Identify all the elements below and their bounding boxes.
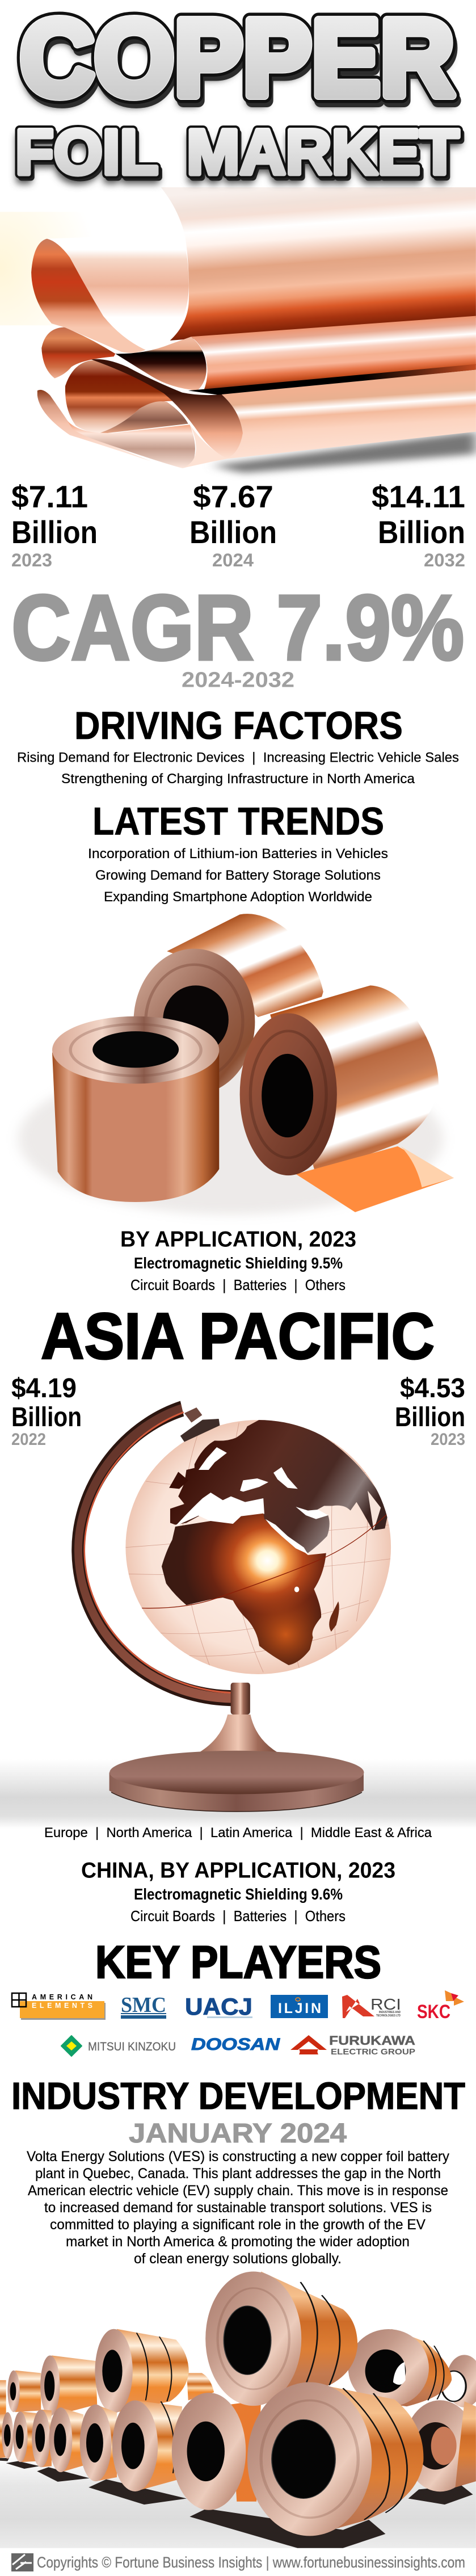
logo: Mitsui Kinzoku: [61, 2036, 176, 2056]
globe foot: [173, 1683, 304, 1763]
china segment highlight: Electromagnetic Shielding 9.6%: [134, 1885, 343, 1903]
logo: RCI: TECHNOLOGIES LTD: [376, 2014, 401, 2018]
copper coils image: [0, 2271, 476, 2548]
logo: SKC: [417, 1990, 464, 2023]
loose foil: [296, 1146, 454, 1212]
logo: UACJ: UACJ: [185, 1993, 252, 2020]
title line two: FOIL: [18, 120, 161, 191]
logo: RCI: RCI: [370, 1995, 401, 2013]
right rolls: [348, 2329, 476, 2491]
title line two: MARKET: [189, 120, 461, 191]
floor: [0, 2453, 476, 2548]
stat: 2023 region: 2023: [431, 1430, 465, 1449]
stat: 2023: Billion: [11, 514, 98, 550]
title: [15, 0, 461, 194]
logo: SMC: SMC: [121, 1993, 166, 2017]
development body text: to increased demand for sustainable transport solutions. VES is: [44, 2200, 432, 2216]
heading: driving factors: DRIVING FACTORS: [74, 704, 403, 747]
title line two: MARKET: [187, 117, 459, 187]
africa: [162, 1514, 326, 1665]
lower drape: [91, 359, 243, 459]
equator: [138, 1514, 388, 1608]
copper rolls image: [18, 914, 454, 1215]
stat: 2022: $4.19: [11, 1373, 77, 1403]
title shadow: FOIL: [15, 123, 158, 194]
hero foil image: [0, 187, 476, 473]
top pivot: [180, 1407, 220, 1442]
latest trends list: Expanding Smartphone Adoption Worldwide: [104, 889, 372, 905]
inner hump: [100, 401, 188, 433]
lake: [294, 1587, 299, 1592]
development body text: [27, 2149, 449, 2267]
china segment list: Circuit Boards | Batteries | Others: [130, 1907, 346, 1924]
segment highlight: Electromagnetic Shielding 9.5%: [134, 1254, 343, 1272]
stat: 2024: 2024: [212, 550, 254, 570]
left warm glow: [0, 212, 97, 325]
deep lobe: [65, 360, 173, 433]
title line two: [15, 117, 461, 191]
title shadow: COPPER: [20, 5, 454, 127]
upright roll: [52, 1016, 219, 1202]
title shadow: MARKET: [187, 123, 459, 194]
bottom fold: [182, 425, 228, 468]
black sea: [240, 1478, 268, 1491]
driving factors list: [17, 750, 459, 787]
logo: RCI: [342, 1995, 401, 2018]
logo: Doosan: DOOSAN: [191, 2035, 281, 2054]
heading: key players: KEY PLAYERS: [95, 1937, 381, 1988]
date: JANUARY 2024: [129, 2119, 347, 2149]
far rolls: [0, 2329, 214, 2420]
title line two: MARKET: [187, 117, 459, 187]
logo: ILJIN: [271, 1995, 328, 2018]
globe arm: [78, 1409, 232, 1698]
madagascar: [329, 1602, 339, 1632]
title line two: FOIL: [15, 117, 158, 187]
lower sheet: [222, 370, 476, 459]
base rim line: [111, 1792, 362, 1812]
small lobe: [37, 390, 151, 461]
development body text: market in North America & promoting the wider adoption: [66, 2234, 410, 2250]
logo: ILJIN: ILJIN: [278, 2001, 321, 2016]
driving factors list: Rising Demand for Electronic Devices | Increasing Electric Vehicle Sales: [17, 750, 459, 766]
arabian sea: [368, 1491, 381, 1531]
logo: RCI: INDUSTRIES AND: [379, 2011, 401, 2014]
title line one: COPPER: [22, 2, 457, 124]
logo: American Elements: AMERICAN: [32, 1993, 92, 2001]
right roll: [240, 985, 454, 1212]
rear foil sheet: [161, 187, 476, 341]
stat: 2032: 2032: [424, 550, 465, 570]
globe sphere: [125, 1407, 391, 1680]
lower sheet left: [67, 420, 195, 468]
heading: latest trends: LATEST TRENDS: [92, 800, 384, 843]
stat: 2023 region: [395, 1373, 465, 1449]
segment list: Circuit Boards | Batteries | Others: [130, 1276, 346, 1293]
stat: 2032: Billion: [378, 514, 465, 550]
baltic sea: [199, 1447, 227, 1470]
logo: Furukawa: FURUKAWA: [329, 2033, 415, 2048]
stat: 2023: $7.11: [11, 479, 88, 514]
latest trends list: Incorporation of Lithium-ion Batteries in Vehicles: [88, 846, 388, 862]
stat: 2024: [189, 479, 277, 570]
development body text: of clean energy solutions globally.: [134, 2251, 342, 2267]
big front roll: [247, 2382, 423, 2536]
back roll: [133, 914, 323, 1095]
logo: Mitsui Kinzoku: MITSUI KINZOKU: [88, 2040, 176, 2053]
stat: 2023 region: Billion: [395, 1402, 465, 1432]
dark gap: [188, 364, 476, 396]
middle sheet: [191, 316, 476, 392]
logo: Furukawa: [290, 2033, 415, 2057]
latest trends list: [88, 846, 388, 905]
logo: American Elements: ELEMENTS: [32, 2002, 92, 2010]
stat: 2024: $7.67: [193, 479, 273, 514]
heading: china by application: CHINA, BY APPLICATION, 2023: [81, 1858, 395, 1883]
stat: 2023: [11, 479, 98, 570]
coil stands: [0, 2458, 473, 2548]
title line two: FOIL: [15, 117, 158, 187]
stat: 2022: 2022: [11, 1430, 46, 1449]
left lobe: [41, 327, 115, 379]
stat: 2022: Billion: [11, 1402, 82, 1432]
curl inner: [31, 239, 146, 353]
eurasia and europe: [170, 1419, 389, 1553]
logo: American Elements: [12, 1993, 106, 2020]
heading: by application: BY APPLICATION, 2023: [120, 1227, 356, 1252]
curl front: [47, 234, 189, 350]
globe base: [109, 1751, 364, 1812]
stat: 2032: $14.11: [372, 479, 465, 514]
southern africa glow: [246, 1599, 321, 1665]
grid lines: [125, 1423, 391, 1672]
stacked top roll: [205, 2271, 357, 2502]
stat: 2022: [11, 1373, 82, 1449]
base shadow: [0, 1759, 476, 1829]
caspian sea: [273, 1467, 298, 1489]
stat: 2023 region: $4.53: [400, 1373, 465, 1403]
british isles: [169, 1472, 185, 1489]
other regions: Europe | North America | Latin America | Middle East & Africa: [44, 1825, 432, 1840]
middle front roll: [172, 2393, 246, 2510]
stat: 2024: Billion: [189, 514, 277, 550]
front row small: [0, 2401, 182, 2491]
central drape: [115, 337, 207, 390]
title shadow: [15, 5, 459, 194]
floor shadow: [18, 1062, 443, 1215]
mediterranean: [175, 1493, 264, 1526]
persian gulf: [296, 1507, 328, 1519]
stat: 2023: 2023: [11, 550, 52, 570]
driving factors list: Strengthening of Charging Infrastructure in North America: [61, 771, 415, 787]
development body text: Volta Energy Solutions (VES) is constructing a new copper foil battery: [27, 2149, 449, 2165]
red sea: [266, 1519, 308, 1554]
globe stand: [78, 1409, 364, 1812]
development body text: American electric vehicle (EV) supply chain. This move is in response: [28, 2183, 448, 2199]
stat: 2032: [372, 479, 465, 570]
development body text: committed to playing a significant role in the growth of the EV: [50, 2217, 426, 2233]
footer logo: [11, 2553, 33, 2571]
CAGR period: 2024-2032: [182, 669, 294, 692]
heading: asia pacific: ASIA PACIFIC: [41, 1300, 435, 1373]
logo: Furukawa: ELECTRIC GROUP: [331, 2047, 415, 2057]
latest trends list: Growing Demand for Battery Storage Solutions: [95, 868, 381, 883]
logo: SKC: SKC: [417, 2001, 450, 2023]
development body text: plant in Quebec, Canada. This plant addresses the gap in the North: [35, 2166, 441, 2182]
shadow under lower sheet: [212, 431, 476, 473]
